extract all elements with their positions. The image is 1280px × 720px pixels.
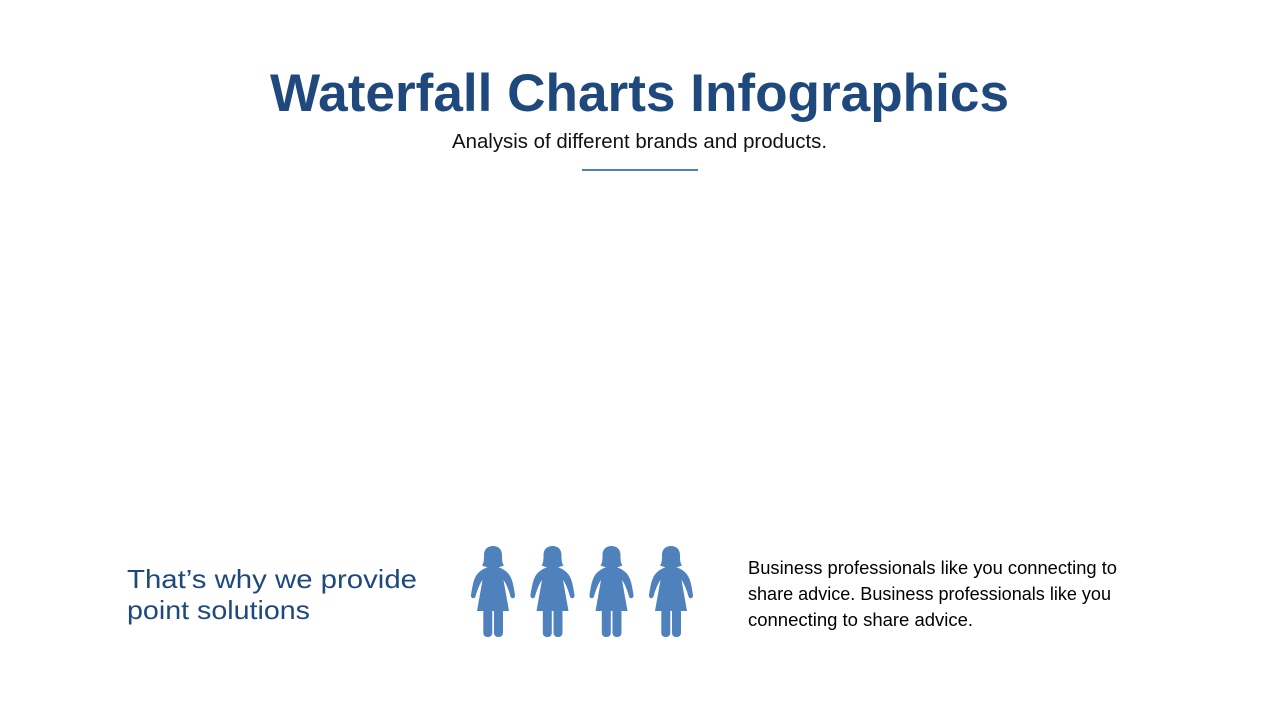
heading: point solutions: That’s why we provide — [127, 564, 417, 594]
icon row: four female figures — [471, 546, 693, 637]
icon: female figure 1 — [471, 546, 515, 637]
icon: female figure 2 — [530, 546, 575, 637]
heading: point solutions: point solutions — [127, 595, 310, 625]
icon: female figure 3 — [589, 546, 634, 637]
heading underline — [582, 169, 698, 171]
text block: description: share advice. Business professionals like you — [748, 584, 1111, 604]
subtitle: Analysis of different brands and products. — [452, 131, 827, 153]
text block: description: Business professionals like you connecting to — [748, 558, 1117, 578]
heading: point solutions — [127, 564, 417, 625]
text block: description: connecting to share advice. — [748, 610, 973, 630]
icon: female figure 4 — [649, 546, 693, 637]
title: Waterfall Charts Infographics — [270, 64, 1009, 123]
text block: description — [748, 558, 1117, 630]
